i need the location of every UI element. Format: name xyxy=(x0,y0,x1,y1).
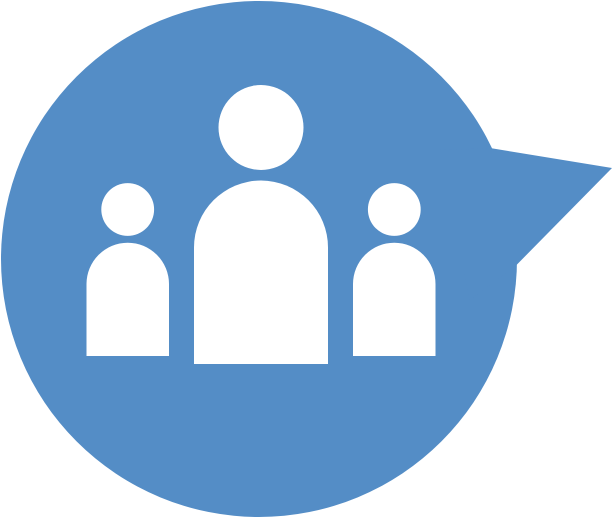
person: right xyxy=(353,183,436,356)
person: left xyxy=(86,183,169,356)
person: center xyxy=(194,85,328,364)
